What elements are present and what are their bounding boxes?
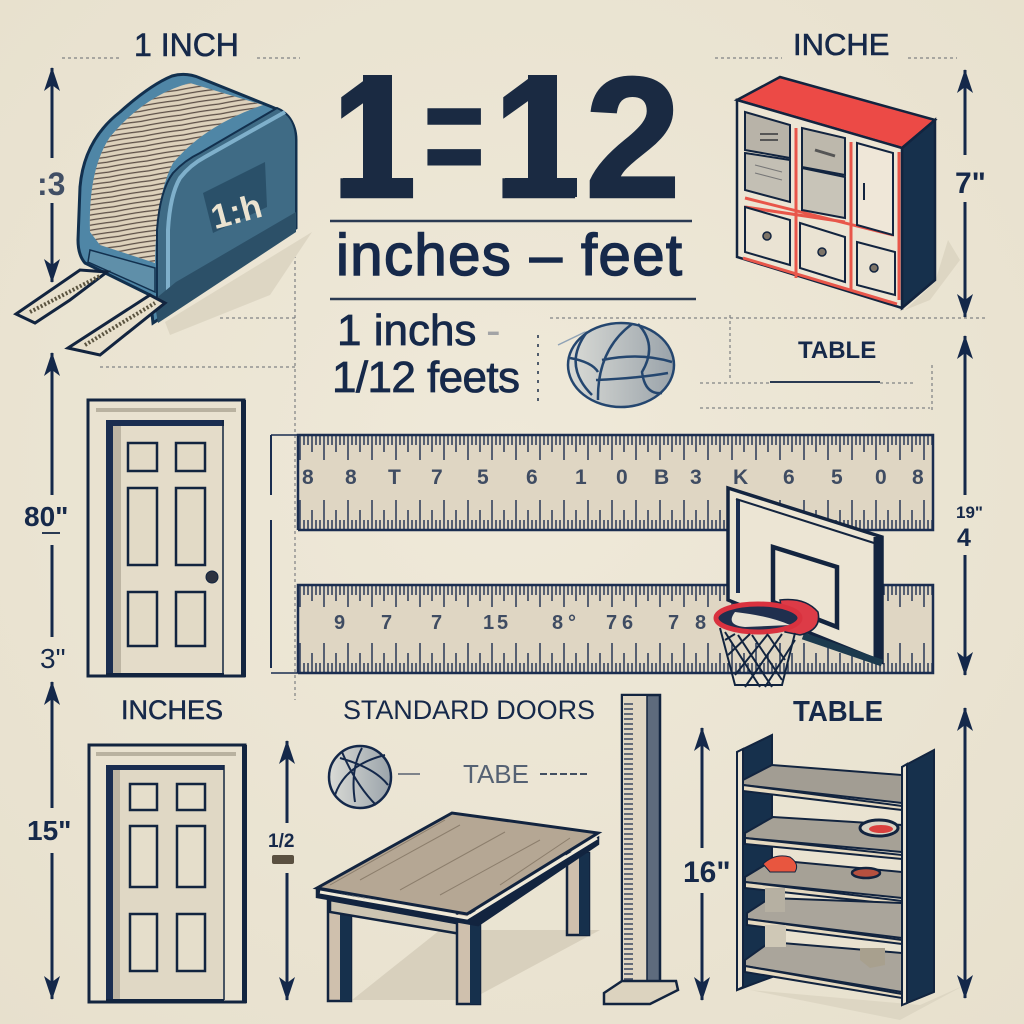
icon: tape measure: 1:h xyxy=(207,187,266,237)
icon: basketball hoop xyxy=(716,488,882,687)
text block: conversion: 1 inchs xyxy=(337,306,476,355)
arrow: tape measure height xyxy=(50,68,54,282)
label: hoop height: 4 xyxy=(957,524,971,552)
icon: table xyxy=(317,813,600,1004)
subtitle: inches – feet xyxy=(336,223,682,288)
label: cabinet height: 7" xyxy=(955,167,986,200)
label: 1 inch: 1 INCH xyxy=(134,27,239,63)
icon: cabinet xyxy=(737,77,960,310)
arrow: door height xyxy=(50,353,54,637)
arrow: left lower xyxy=(50,682,54,999)
ruler: lower xyxy=(298,585,933,673)
icon: shelf xyxy=(737,735,965,1020)
icon: tape measure xyxy=(16,74,312,355)
label: table lower right: TABLE xyxy=(793,696,883,728)
arrow: hoop height xyxy=(964,336,966,675)
text block: conversion: 1/12 feets xyxy=(332,353,520,402)
arrow: mid lower xyxy=(286,741,288,1000)
arrow: shelf height xyxy=(964,708,966,998)
label: standard doors: STANDARD DOORS xyxy=(343,695,595,725)
title: 1=12: 1 xyxy=(494,42,578,234)
text block: conversion: - xyxy=(486,306,501,355)
arrow: cabinet height xyxy=(964,70,966,317)
label: mid height: 1/2 xyxy=(268,831,294,852)
icon: measuring post xyxy=(604,695,678,1004)
label: 3 inch: 3" xyxy=(40,643,66,674)
label: door height: 80" xyxy=(24,501,68,532)
title: 1=12: 1 xyxy=(332,42,416,234)
label: table top: TABLE xyxy=(798,337,876,364)
icon: small ball xyxy=(329,746,391,808)
table underline xyxy=(770,381,880,383)
icon: door lower xyxy=(89,745,247,1003)
label: mid height xyxy=(268,831,294,864)
label: lower door height: 15" xyxy=(27,815,71,846)
title: 1=12: 2 xyxy=(585,42,681,234)
title: 1=12: = xyxy=(423,49,485,219)
divider lines under title xyxy=(330,221,696,299)
label: post height: 16" xyxy=(683,856,731,889)
label: hoop height: 19" xyxy=(956,503,983,522)
divider: dotted vertical xyxy=(537,335,539,406)
ruler: upper xyxy=(298,435,933,530)
label: tape side: :3 xyxy=(37,166,65,202)
icon: ball xyxy=(558,323,674,407)
text block: conversion xyxy=(332,306,520,402)
label: table dashed: TABE xyxy=(463,759,529,789)
label: inches lower: INCHES xyxy=(121,695,223,725)
label: inche: INCHE xyxy=(793,27,889,62)
guide: left of rulers xyxy=(271,435,298,673)
dashed guide lines xyxy=(62,58,985,700)
ruler: lower: 977158°7678 xyxy=(334,612,706,634)
label: hoop height xyxy=(956,503,983,552)
arrow: post height xyxy=(700,728,704,1000)
title: 1=12 xyxy=(332,42,681,234)
ruler: upper: 88T75610B3K6508 xyxy=(302,466,924,489)
icon: door upper xyxy=(88,400,246,677)
